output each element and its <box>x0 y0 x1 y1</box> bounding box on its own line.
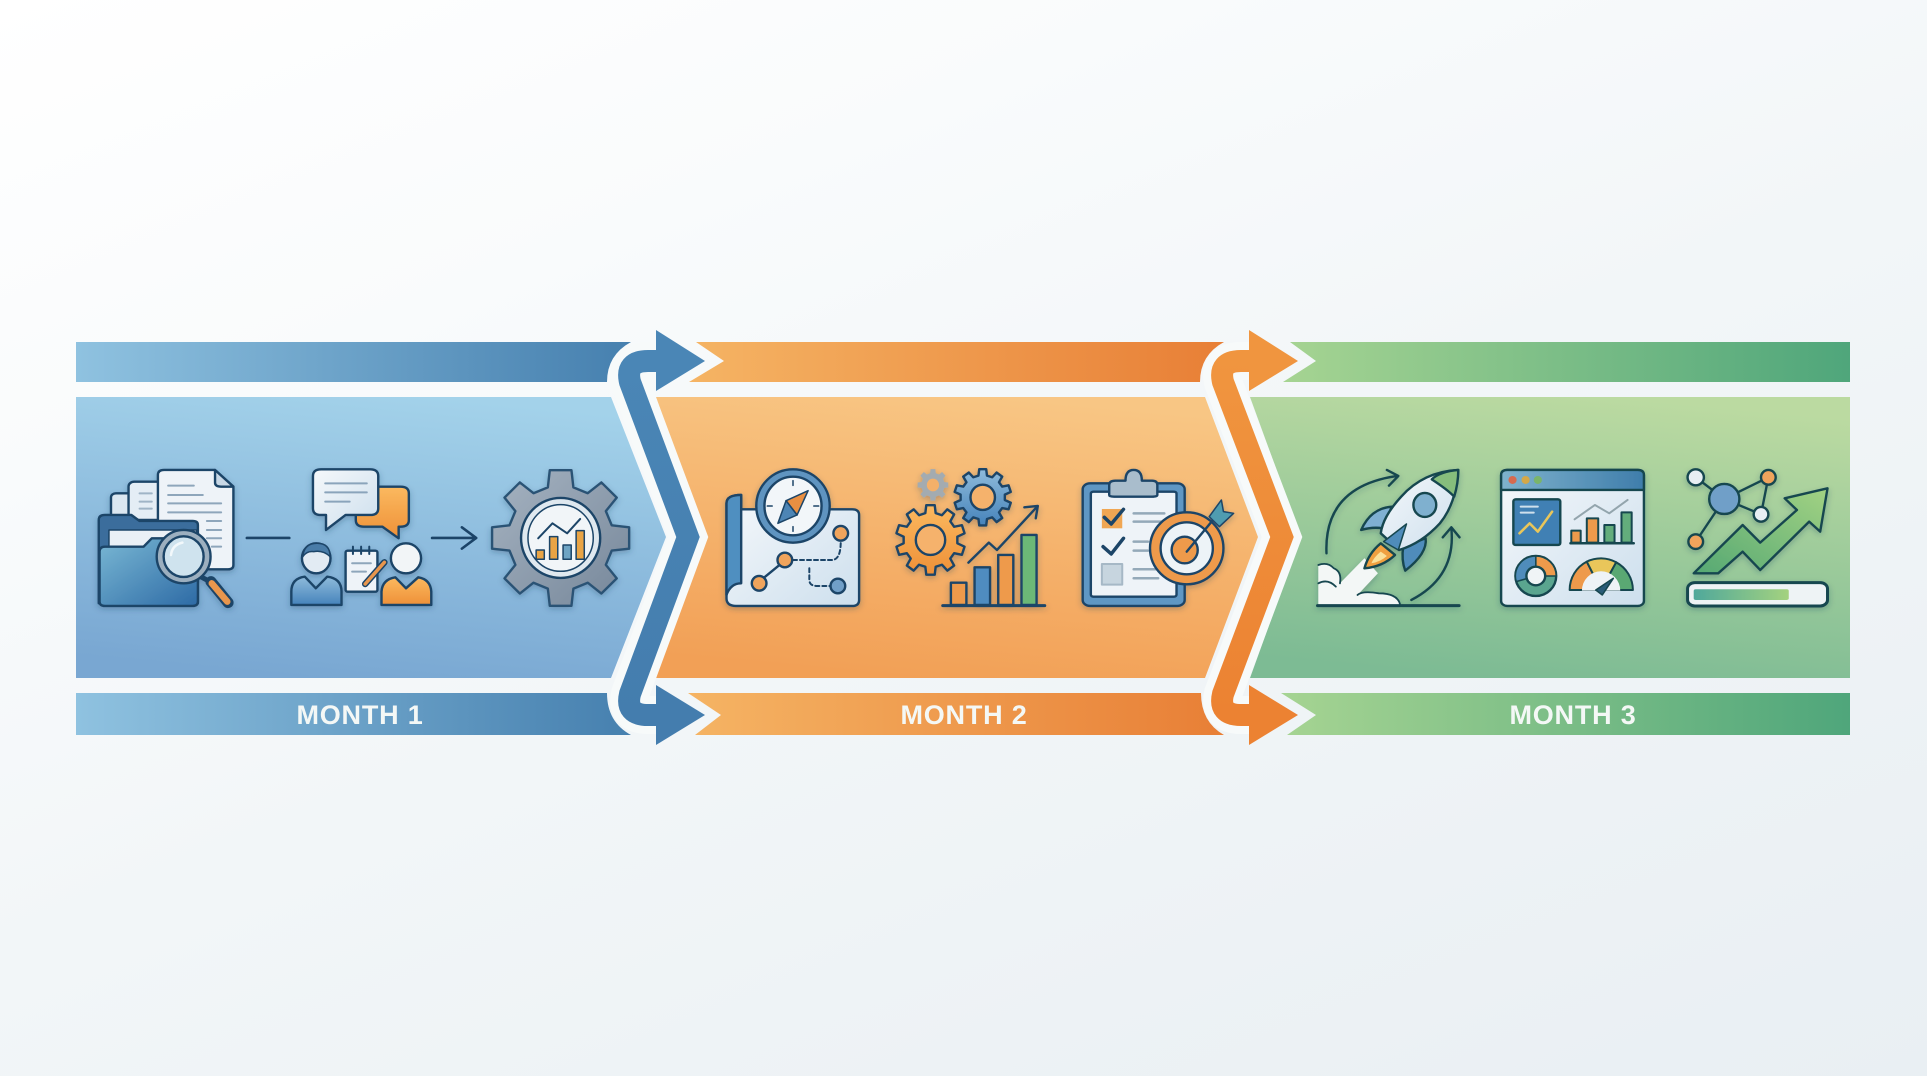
icon: rocket launch <box>1318 470 1460 606</box>
bottom orange bar <box>688 693 1224 735</box>
main green panel <box>1250 397 1850 678</box>
label: month 3: MONTH 3 <box>1509 700 1637 730</box>
icon: conversation between two people <box>291 469 431 605</box>
main blue chevron panel <box>76 397 666 678</box>
label: month 1: MONTH 1 <box>296 700 424 730</box>
bottom green bar <box>1281 693 1850 735</box>
icon: gears with growth chart <box>896 469 1045 606</box>
month 3 icons <box>1318 469 1828 606</box>
month 2 icons <box>726 469 1234 606</box>
arrow: discussion to gear <box>432 527 476 549</box>
bottom blue bar <box>76 693 631 735</box>
main orange chevron panel <box>656 397 1258 678</box>
top blue bar <box>76 342 631 382</box>
top green bar <box>1283 342 1850 382</box>
panel: month 3 <box>1250 342 1850 735</box>
arrow: blue connector ribbon from month 1 to month 2 <box>629 330 705 745</box>
top orange bar <box>689 342 1224 382</box>
label: month 2: MONTH 2 <box>900 700 1028 730</box>
month 1 icons <box>99 469 629 606</box>
panel: month 2 <box>656 342 1258 735</box>
icon: gear with analytics chart <box>492 470 629 606</box>
icon: folder with documents and magnifier <box>99 470 233 606</box>
icon: roadmap with compass <box>726 469 859 606</box>
panel: month 1 <box>76 342 666 735</box>
arrow: line from documents to discussion <box>247 537 289 539</box>
icon: network and rising trend arrow <box>1688 469 1828 606</box>
arrow: orange connector ribbon from month 2 to month 3 <box>1222 330 1298 745</box>
icon: checklist clipboard with target <box>1083 470 1234 606</box>
icon: analytics dashboard window <box>1501 470 1644 606</box>
